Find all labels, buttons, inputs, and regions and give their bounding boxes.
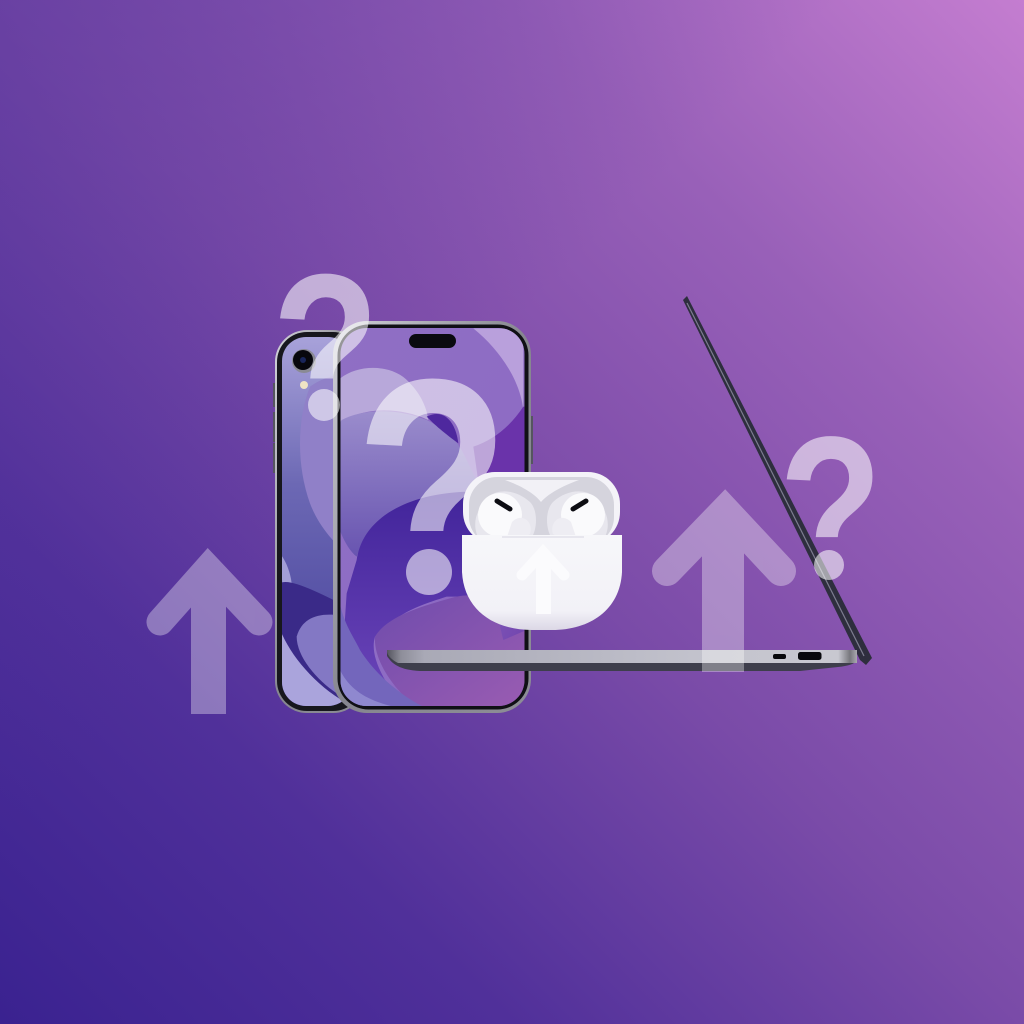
- arrow: left up arrow: [160, 568, 259, 714]
- phone wallpaper: [329, 328, 527, 710]
- question mark: top left: [280, 274, 370, 421]
- front phone: [329, 321, 533, 713]
- case lid: [463, 472, 620, 545]
- usb port: [798, 652, 822, 660]
- case body: [462, 535, 622, 630]
- small port: [773, 654, 786, 659]
- flash: [300, 381, 308, 389]
- case arrow: [522, 552, 564, 614]
- laptop base: [387, 650, 857, 671]
- dynamic island: [409, 334, 456, 348]
- question mark: top left: ?: [272, 231, 379, 469]
- rear camera: [292, 349, 316, 373]
- laptop: [387, 296, 872, 671]
- airpods case: [462, 472, 622, 630]
- laptop lid: [683, 296, 872, 665]
- left earbud: [478, 493, 531, 540]
- question mark: right: ?: [779, 393, 882, 624]
- question mark: large centre: ?: [355, 315, 510, 664]
- arrow: right up arrow: [667, 511, 781, 672]
- right earbud: [552, 493, 605, 540]
- question mark: large centre: [366, 378, 496, 595]
- back phone: [273, 330, 350, 713]
- question mark: right: [786, 436, 872, 580]
